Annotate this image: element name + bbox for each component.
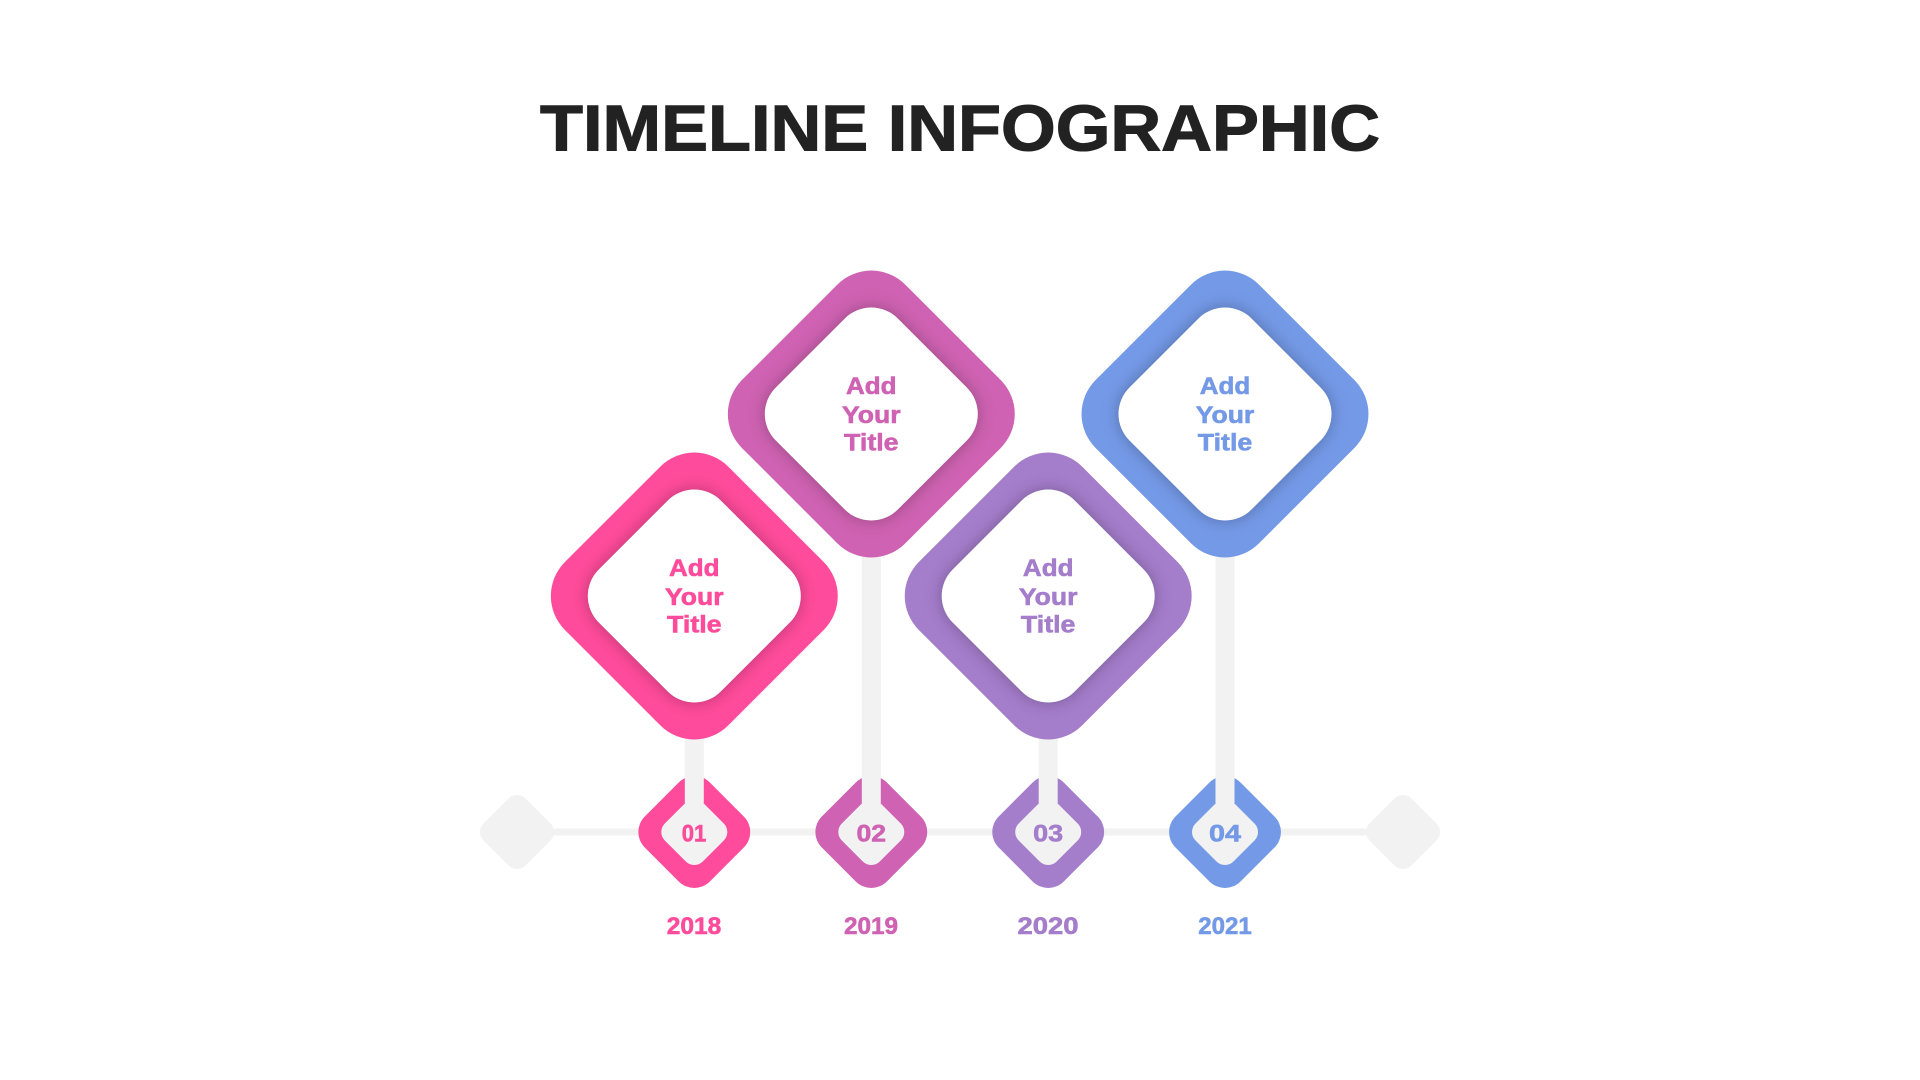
- stem 04: [1216, 552, 1234, 803]
- marker core 04: [1187, 794, 1263, 870]
- diamond 3 ring: [885, 433, 1212, 759]
- number 04: 04: [1209, 821, 1242, 848]
- diamond 1 ring: [531, 433, 858, 759]
- marker ring 02: [806, 767, 936, 897]
- diamond 2 text: [842, 373, 901, 457]
- diamond 3 text: [1019, 555, 1077, 639]
- diamond 1 text: Title: [667, 612, 722, 639]
- diamond 4 white centre: [1103, 292, 1347, 536]
- diamond 3 white centre: [926, 474, 1170, 718]
- number 01: 01: [682, 821, 706, 848]
- stem 03: [1039, 735, 1058, 803]
- diamond 4 ring: [1062, 251, 1388, 577]
- year 2020: 2020: [1018, 913, 1078, 940]
- diamond 4 text: Add: [1200, 373, 1250, 400]
- diamond 1 text: [665, 555, 724, 639]
- year 2021: 2021: [1198, 913, 1252, 940]
- diamond 2 inner shadow: [749, 292, 993, 536]
- timeline axis line: [517, 828, 1403, 836]
- marker ring 01: [629, 767, 759, 897]
- diamond 2 text: Title: [844, 430, 899, 457]
- right end diamond: [1361, 790, 1445, 874]
- diamond 4 text: Your: [1196, 402, 1254, 429]
- milestone 01 marker: [629, 735, 759, 897]
- diamond 1 inner shadow: [572, 474, 816, 718]
- year 2019: 2019: [844, 913, 898, 940]
- diamond 4 inner shadow: [1103, 292, 1347, 536]
- panel: diamond 4: [1062, 251, 1388, 577]
- panel: diamond 1: [531, 433, 858, 759]
- year 2018: 2018: [667, 913, 721, 940]
- marker ring 04: [1160, 767, 1290, 897]
- number 03: 03: [1033, 821, 1063, 848]
- diamond 3 text: Add: [1023, 555, 1073, 582]
- diamond 1 white centre: [572, 474, 816, 718]
- diamond 2 white centre: [749, 292, 993, 536]
- title: TIMELINE INFOGRAPHIC: [540, 92, 1380, 165]
- marker core 01: [656, 794, 732, 870]
- diamond 2 ring: [708, 251, 1035, 577]
- left end diamond: [475, 790, 559, 874]
- milestone 04 marker: [1160, 552, 1290, 897]
- marker core 03: [1010, 794, 1086, 870]
- number 02: 02: [857, 821, 886, 848]
- diamond 3 text: Title: [1021, 612, 1075, 639]
- diamond 4 text: Title: [1198, 430, 1252, 457]
- diamond 1 text: Your: [665, 584, 724, 611]
- panel: diamond 2: [708, 251, 1035, 577]
- diamond 2 text: Your: [842, 402, 901, 429]
- milestone 02 marker: [806, 552, 936, 897]
- marker ring 03: [983, 767, 1113, 897]
- diamond 3 text: Your: [1019, 584, 1077, 611]
- marker core 02: [833, 794, 909, 870]
- diamond 2 text: Add: [846, 373, 897, 400]
- milestone 03 marker: [983, 735, 1113, 897]
- panel: diamond 3: [885, 433, 1212, 759]
- stem 01: [685, 735, 704, 803]
- stem 02: [862, 552, 881, 803]
- diamond 3 inner shadow: [926, 474, 1170, 718]
- diamond 4 text: [1196, 373, 1254, 457]
- diamond 1 text: Add: [669, 555, 720, 582]
